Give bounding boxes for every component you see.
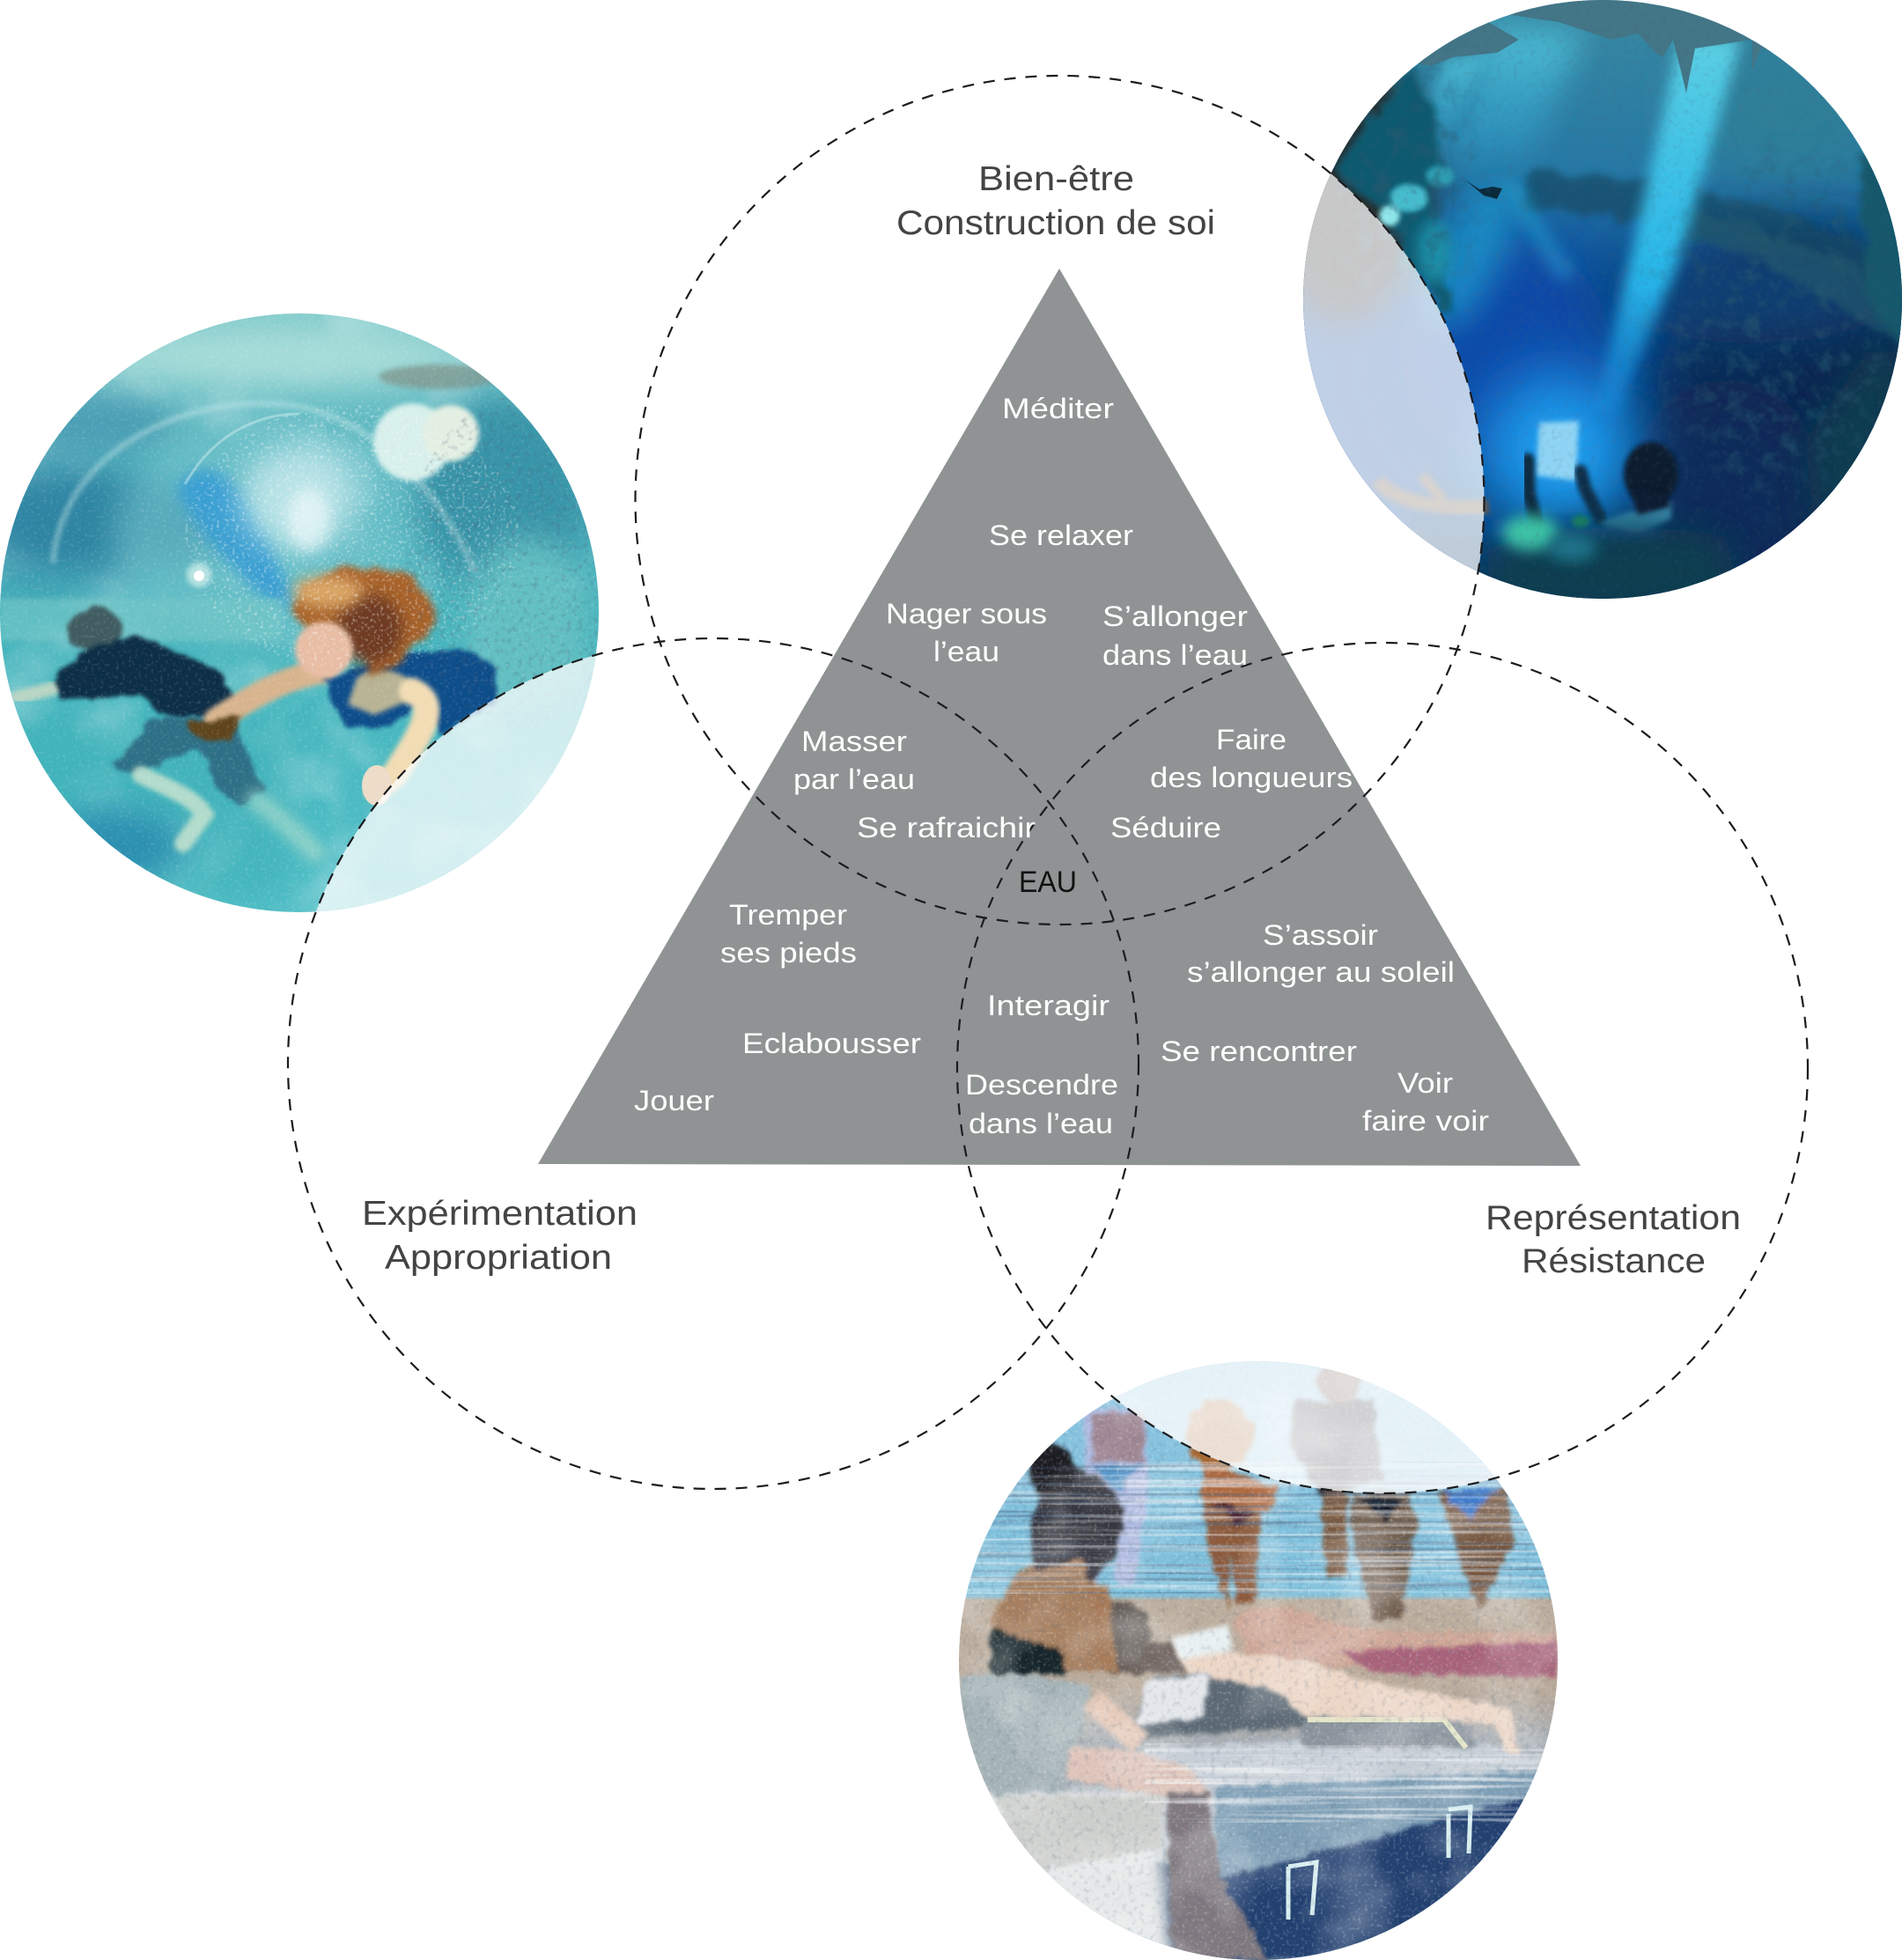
photo: cavern diver and reader bbox=[1264, 0, 1902, 616]
diver bbox=[1466, 181, 1502, 199]
overlap wash: top circle over cavern photo bbox=[636, 76, 1485, 925]
rock band bbox=[1520, 166, 1863, 262]
labels: wellbeing zone: dans l’eau bbox=[1102, 639, 1248, 671]
heading: left circle: Expérimentation bbox=[362, 1195, 638, 1233]
basket hat bbox=[959, 1674, 1092, 1796]
labels: wellbeing zone: Se relaxer bbox=[989, 519, 1133, 551]
labels: wellbeing and experimentation overlap bbox=[793, 726, 1036, 844]
upper washed figures bbox=[1186, 1400, 1253, 1470]
concrete platform and water bbox=[1092, 1735, 1558, 1875]
labels: wellbeing and representation overlap: Faire bbox=[1216, 724, 1286, 755]
labels: wellbeing and experimentation overlap: Se rafraichir bbox=[857, 812, 1036, 844]
legs bbox=[1092, 1699, 1140, 1743]
labels: representation zone: Voir bbox=[1397, 1067, 1453, 1099]
reader: book bbox=[1484, 374, 1633, 524]
girl bbox=[183, 566, 496, 806]
labels: wellbeing zone: Méditer bbox=[1002, 393, 1114, 424]
labels: experimentation and representation overlap: Descendre bbox=[965, 1069, 1118, 1101]
photo: children swimming underwater bbox=[0, 313, 634, 912]
labels: experimentation zone: ses pieds bbox=[720, 937, 857, 969]
water line bbox=[0, 599, 282, 641]
heading: left circle bbox=[362, 1195, 638, 1277]
heading: right circle: Représentation bbox=[1485, 1199, 1741, 1237]
labels: experimentation zone: Jouer bbox=[634, 1085, 714, 1116]
heading: right circle: Résistance bbox=[1522, 1242, 1706, 1280]
dashed venn circles bbox=[288, 76, 1808, 1493]
photo: sunbathers on the rocks bbox=[959, 1361, 1558, 1960]
label: centre: EAU bbox=[1019, 866, 1077, 899]
dome bbox=[114, 423, 414, 652]
labels: experimentation and representation overlap: Interagir bbox=[987, 990, 1110, 1021]
seated woman bbox=[991, 1444, 1123, 1677]
labels: representation zone: Se rencontrer bbox=[1161, 1035, 1357, 1067]
labels: wellbeing and representation overlap: des longueurs bbox=[1150, 762, 1353, 793]
labels: wellbeing and experimentation overlap: Masser bbox=[801, 726, 907, 757]
rock bbox=[1127, 1669, 1312, 1739]
labels: experimentation zone: Eclabousser bbox=[742, 1028, 921, 1059]
floating arm bbox=[1378, 480, 1488, 507]
labels: wellbeing zone: Nager sous bbox=[886, 598, 1047, 630]
labels: wellbeing and experimentation overlap: par l’eau bbox=[793, 763, 915, 795]
heading: top circle: Bien-être bbox=[978, 160, 1134, 198]
lying bodies bbox=[1233, 1606, 1558, 1673]
labels: representation zone: faire voir bbox=[1362, 1105, 1489, 1137]
labels: experimentation zone bbox=[634, 899, 921, 1116]
labels: experimentation and representation overlap: dans l’eau bbox=[969, 1108, 1113, 1139]
overlap wash: right circle over sunbathers photo bbox=[957, 643, 1808, 1493]
labels: wellbeing and representation overlap bbox=[1110, 724, 1353, 844]
heading: top circle: Construction de soi bbox=[896, 204, 1215, 242]
ladders bbox=[1288, 1807, 1471, 1919]
labels: representation zone: S’assoir bbox=[1263, 919, 1378, 951]
labels: representation zone: s’allonger au soleil bbox=[1187, 956, 1455, 988]
reader: arms and body bbox=[1528, 460, 1539, 533]
labels: representation zone bbox=[1161, 919, 1489, 1137]
left rocks bbox=[1334, 66, 1453, 326]
labels: wellbeing zone: l’eau bbox=[933, 636, 999, 667]
labels: experimentation zone: Tremper bbox=[729, 899, 847, 931]
cavern ceiling bbox=[1418, 0, 1767, 92]
light rays bbox=[1444, 26, 1585, 163]
labels: wellbeing zone: S’allonger bbox=[1102, 601, 1248, 632]
labels: wellbeing zone bbox=[886, 393, 1248, 671]
heading: left circle: Appropriation bbox=[385, 1239, 612, 1277]
labels: wellbeing and representation overlap: Séduire bbox=[1110, 812, 1221, 844]
whale eye bbox=[187, 563, 211, 587]
overlap wash: left circle over swimmers photo bbox=[288, 638, 1139, 1489]
labels: experimentation and representation overlap bbox=[965, 990, 1118, 1139]
heading: right circle bbox=[1485, 1199, 1741, 1280]
central grey triangle bbox=[538, 269, 1581, 1166]
standing figures bbox=[1076, 1363, 1515, 1620]
bokeh bbox=[373, 403, 451, 481]
boy bbox=[18, 608, 317, 854]
heading: top circle bbox=[896, 160, 1215, 242]
